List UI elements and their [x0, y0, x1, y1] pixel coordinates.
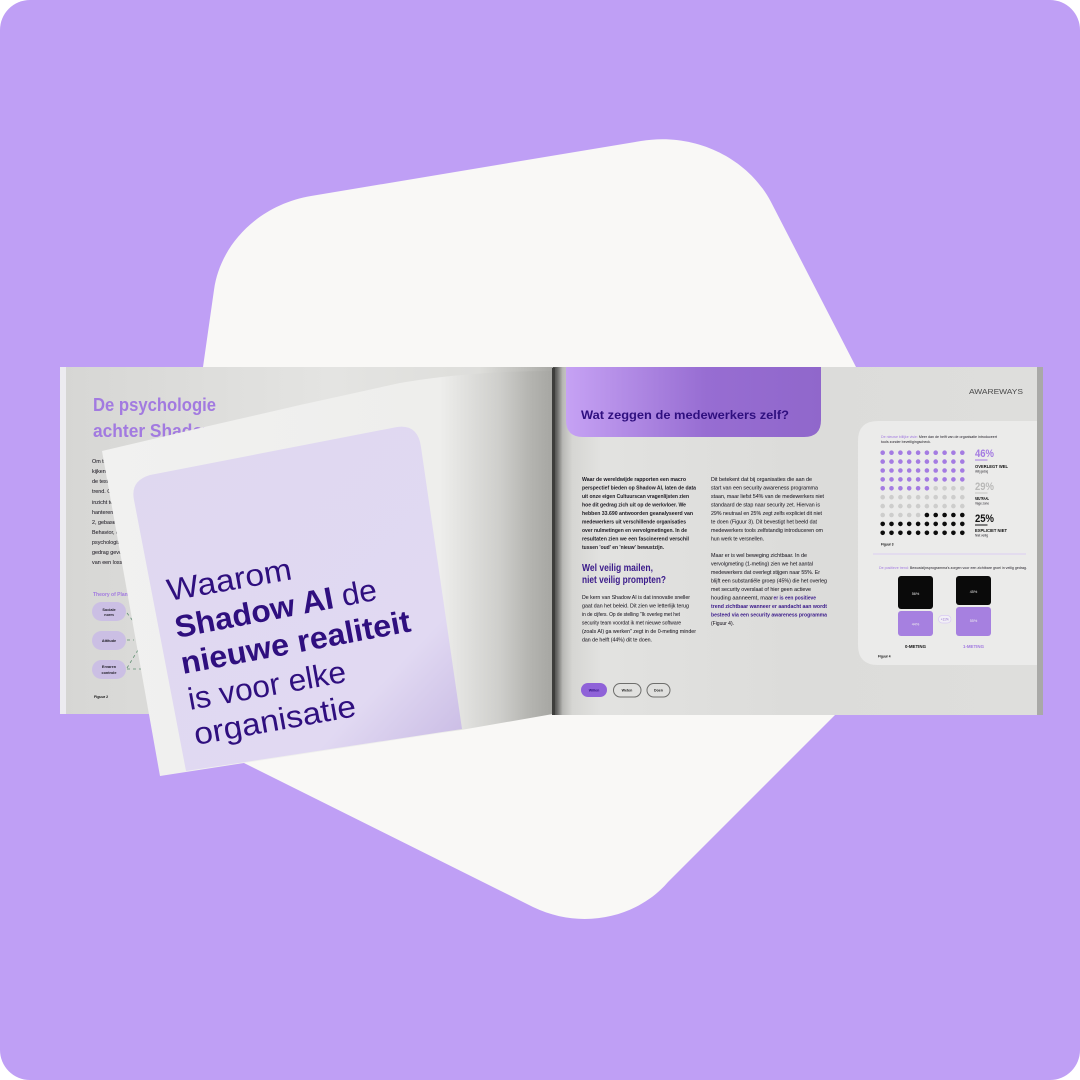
column 2 text: houding aanneemt, maar	[711, 596, 773, 602]
logo: AWAREWAYS	[969, 387, 1023, 396]
right page	[553, 367, 1043, 715]
column 1 text: uit onze eigen Cultuurscan vragenlijsten zien	[582, 494, 689, 500]
panel 1 title: De nieuwe billijke visie: Meer dan de helft van de organisatie introduceert	[881, 434, 998, 439]
column 2 text	[711, 477, 828, 627]
dashed connectors	[127, 613, 142, 669]
column 2 text: te doen (Figuur 3). Dit bevestigt het beeld dat	[711, 520, 817, 526]
left page body text	[92, 459, 131, 566]
cover title: is voor elke	[185, 654, 349, 717]
cover title: organisatie	[191, 688, 359, 752]
grey dots 29%	[880, 486, 965, 517]
cover title	[164, 552, 413, 752]
spine shadow	[552, 368, 555, 715]
cover title: Waarom	[164, 552, 294, 608]
column 2 text: vervolgmeting (1-meting) zien we het aantal	[711, 562, 813, 568]
cover title: Shadow AI de	[172, 572, 380, 645]
node: sociale norm: norm	[104, 613, 114, 617]
left page body text: trend. Om meer	[92, 489, 130, 495]
pill: willen: Willen	[589, 688, 599, 692]
left page	[60, 367, 553, 714]
black dots 25%	[880, 513, 965, 535]
delta pill +11%: +11%	[941, 618, 949, 622]
stacked bar: 1-meting: 1-METING	[963, 644, 985, 649]
column 1 text: tussen 'oud' en 'nieuw' bewustzijn.	[582, 545, 664, 551]
header tab: Wat zeggen de medewerkers zelf?	[581, 410, 789, 422]
left page body text: Behavior, een	[92, 530, 125, 536]
left page heading: De psychologie	[93, 395, 216, 415]
left page body text: gedrag gevormd	[92, 550, 131, 556]
left page heading	[93, 395, 238, 441]
stacked bar: 1-meting	[956, 576, 991, 649]
column 2 text: besteed via een security awareness programma	[711, 612, 828, 618]
left page body text: inzicht te krijgen	[92, 500, 131, 506]
column 2 text: er is een positieve	[774, 596, 816, 602]
column 2 text: standaard de stap naar security zet. Hiervan is	[711, 502, 820, 508]
figure 2 caption: Figuur 2	[94, 695, 108, 699]
navigation pills	[581, 683, 670, 697]
legend: 29% neutraal: NEUTRAAL	[975, 496, 989, 501]
column 1 text	[582, 477, 697, 551]
column 1 second paragraph: gaat dan het beleid. Dit zien we letterlijk terug	[582, 604, 689, 610]
subheading: niet veilig prompten?	[582, 575, 666, 586]
column 2 text: Dit betekent dat bij organisaties die aan de	[711, 477, 812, 483]
column 1 second paragraph: dan de helft (44%) dit te doen.	[582, 638, 652, 644]
node: ervaren controle: Ervaren	[102, 665, 117, 669]
legend: 25% expliciet niet: 25%	[975, 513, 994, 525]
column 1 text: Waar de wereldwijde rapporten een macro	[582, 477, 687, 483]
node: sociale norm	[92, 602, 126, 621]
figure 3 caption: Figuur 3	[881, 542, 894, 546]
white rounded polygon backdrop	[203, 139, 856, 919]
stacked bar: 0-meting: 0-METING	[905, 644, 927, 649]
column 1 second paragraph: De kern van Shadow AI is dat innovatie sneller	[582, 595, 690, 601]
legend: 46% overlegt wel: Veilig gedrag	[975, 470, 988, 474]
column 2 text: hun werk te versnellen.	[711, 536, 764, 542]
legend: 25% expliciet niet	[975, 513, 1007, 538]
column 1 text: hebben 33.690 antwoorden geanalyseerd van	[582, 511, 693, 517]
column 2 text: medewerkers tools zelfstandig introduceren om	[711, 528, 823, 534]
legend: 29% neutraal: Vage zone	[975, 502, 989, 506]
node: attitude: Attitude	[102, 639, 116, 643]
cover card	[133, 427, 462, 771]
column 2 text: start van een security awareness programma	[711, 486, 818, 492]
pill: doen: Doen	[654, 688, 663, 692]
flipping cover sheet	[102, 368, 555, 776]
legend: 29% neutraal: 29%	[975, 481, 994, 493]
legend: 46% overlegt wel	[975, 448, 1008, 474]
theory of planned behavior diagram: Theory of Planned Behavior	[93, 592, 159, 598]
legend: 25% expliciet niet: Niet veilig	[975, 534, 988, 538]
theory of planned behavior diagram	[92, 592, 159, 679]
panel 1 title	[881, 434, 998, 444]
column 1 second paragraph: in de cijfers. Op de stelling “Ik overleg met het	[582, 612, 680, 618]
pill: weten: Weten	[622, 688, 632, 692]
left page body text: psychologisch	[92, 540, 126, 546]
delta pill +11%	[938, 616, 951, 623]
stacked bar: 0-meting	[898, 576, 933, 649]
column 2 text: medewerkers dat overlegt stijgen naar 55%. Er	[711, 570, 820, 576]
column 1 text: medewerkers uit verschillende organisaties	[582, 520, 686, 526]
column 1 text: perspectief bieden op Shadow AI, laten de data	[582, 486, 697, 492]
stacked bar: 0-meting: 44%	[912, 622, 920, 626]
stacked bar: 1-meting: 45%	[970, 590, 978, 594]
column 1 second paragraph: security team voordat ik met nieuwe software	[582, 620, 681, 626]
open brochure	[60, 367, 1043, 776]
column 2 text: met security overslaat of hier geen actieve	[711, 587, 811, 593]
node: ervaren controle: controle	[102, 671, 116, 675]
legend: 25% expliciet niet: EXPLICIET NIET	[975, 528, 1007, 533]
header tab	[566, 367, 821, 437]
column 1 second paragraph: (zoals AI) ga werken” zegt in de 0-meting minder	[582, 629, 696, 635]
data panel	[858, 421, 1037, 665]
left page body text: van een losse	[92, 560, 125, 566]
legend: 29% neutraal	[975, 481, 994, 506]
column 1 text: over nulmetingen en vervolgmetingen. In de	[582, 528, 687, 534]
node: ervaren controle	[92, 660, 126, 679]
legend: 46% overlegt wel: 46%	[975, 448, 994, 460]
column 1 text: hoe dit gedrag zich uit op de werkvloer. We	[582, 502, 686, 508]
subheading	[582, 563, 666, 586]
stacked bar: 0-meting: 56%	[912, 592, 920, 596]
subheading: Wel veilig mailen,	[582, 563, 653, 574]
left page body text: 2, gebaseerd op	[92, 520, 131, 526]
left page body text: Om te begrijpen	[92, 459, 130, 465]
panel 1 title: tools zonder beveiligingscheck.	[881, 439, 931, 444]
cover title: nieuwe realiteit	[178, 604, 413, 681]
node: sociale norm: Sociale	[102, 608, 116, 612]
column 2 text: (Figuur 4).	[711, 621, 734, 627]
dot matrix chart	[880, 450, 965, 535]
column 2 text: staan, maar liefst 54% van de medewerkers niet	[711, 494, 824, 500]
column 1 second paragraph	[582, 595, 696, 644]
panel 2 title: De positieve trend: Bewustzijnsprogramma's zorgen voor een zichtbare groei in veilig gedrag.	[879, 565, 1027, 570]
legend: 46% overlegt wel: OVERLEGT WEL	[975, 464, 1008, 469]
purple dots 46%	[880, 450, 965, 491]
column 2 text: blijft een substantiële groep (45%) die het overleg	[711, 578, 827, 584]
column 2 text: trend zichtbaar wanneer er aandacht aan wordt	[711, 604, 827, 610]
figure 4 caption: Figuur 4	[878, 654, 891, 658]
stacked bar: 1-meting: 55%	[970, 619, 978, 623]
left page heading: achter Shadow AI	[93, 421, 238, 441]
column 1 text: resultaten zien we een fascinerend verschil	[582, 536, 689, 542]
column 2 text: Maar er is wel beweging zichtbaar. In de	[711, 553, 807, 559]
left page body text: de testen van	[92, 479, 124, 485]
column 2 text: 29% neutraal en 25% zegt zelfs expliciet dit niet	[711, 511, 822, 517]
left page body text: kijken we naar	[92, 469, 127, 475]
left page body text: hanteren we in	[92, 510, 127, 516]
